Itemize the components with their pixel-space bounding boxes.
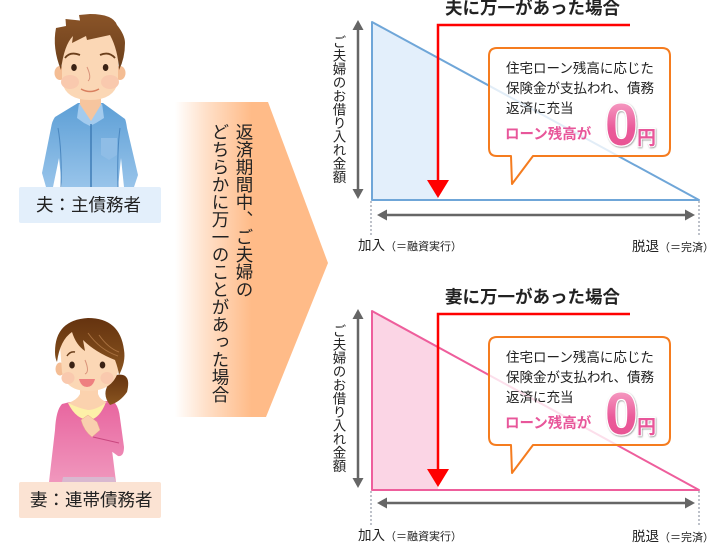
zero yen: 円 [637, 128, 656, 149]
zero yen: 0 [605, 381, 638, 447]
zero yen: 円 [637, 417, 656, 438]
zero yen: 0 [605, 92, 638, 158]
end label: 脱退（＝完済） [632, 239, 714, 254]
callout: 住宅ローン残高に応じた [506, 349, 654, 365]
chart: wife [330, 287, 714, 544]
vertical axis arrow [352, 309, 364, 488]
arrow text: どちらかに万一のことがあった場合 [210, 123, 230, 403]
callout: 返済に充当 [506, 101, 574, 116]
label: husband: 夫：主債務者 [36, 195, 141, 215]
vertical axis label: ご夫婦のお借り入れ金額 [330, 324, 346, 473]
label: wife [19, 482, 161, 518]
end label: 脱退（＝完済） [632, 529, 714, 544]
label: husband [19, 187, 161, 223]
callout: ローン残高が [505, 125, 592, 143]
illustration: wife [49, 318, 128, 482]
horizontal axis arrow [377, 498, 695, 508]
chart title: 妻に万一があった場合 [445, 287, 620, 307]
callout: 住宅ローン残高に応じた [506, 60, 654, 76]
start label: 加入（＝融資実行） [358, 528, 462, 543]
vertical axis label: ご夫婦のお借り入れ金額 [330, 35, 346, 184]
label: wife: 妻：連帯債務者 [30, 490, 152, 510]
callout: ローン残高が [505, 414, 592, 432]
callout: 保険金が支払われ、債務 [506, 81, 654, 96]
central arrow [175, 102, 328, 417]
zero yen [605, 381, 656, 447]
callout: 保険金が支払われ、債務 [506, 370, 654, 385]
start label: 加入（＝融資実行） [358, 238, 462, 253]
arrow text: 返済期間中、ご夫婦の [234, 123, 254, 298]
chart: husband [330, 0, 714, 254]
callout [489, 48, 670, 184]
horizontal axis arrow [377, 210, 695, 220]
callout: 返済に充当 [506, 390, 574, 405]
zero yen [605, 92, 656, 158]
vertical axis arrow [352, 20, 364, 199]
red arrow [427, 314, 630, 487]
callout [489, 337, 670, 473]
red arrow [427, 25, 630, 198]
illustration: husband [42, 14, 138, 187]
arrow text [210, 123, 254, 403]
